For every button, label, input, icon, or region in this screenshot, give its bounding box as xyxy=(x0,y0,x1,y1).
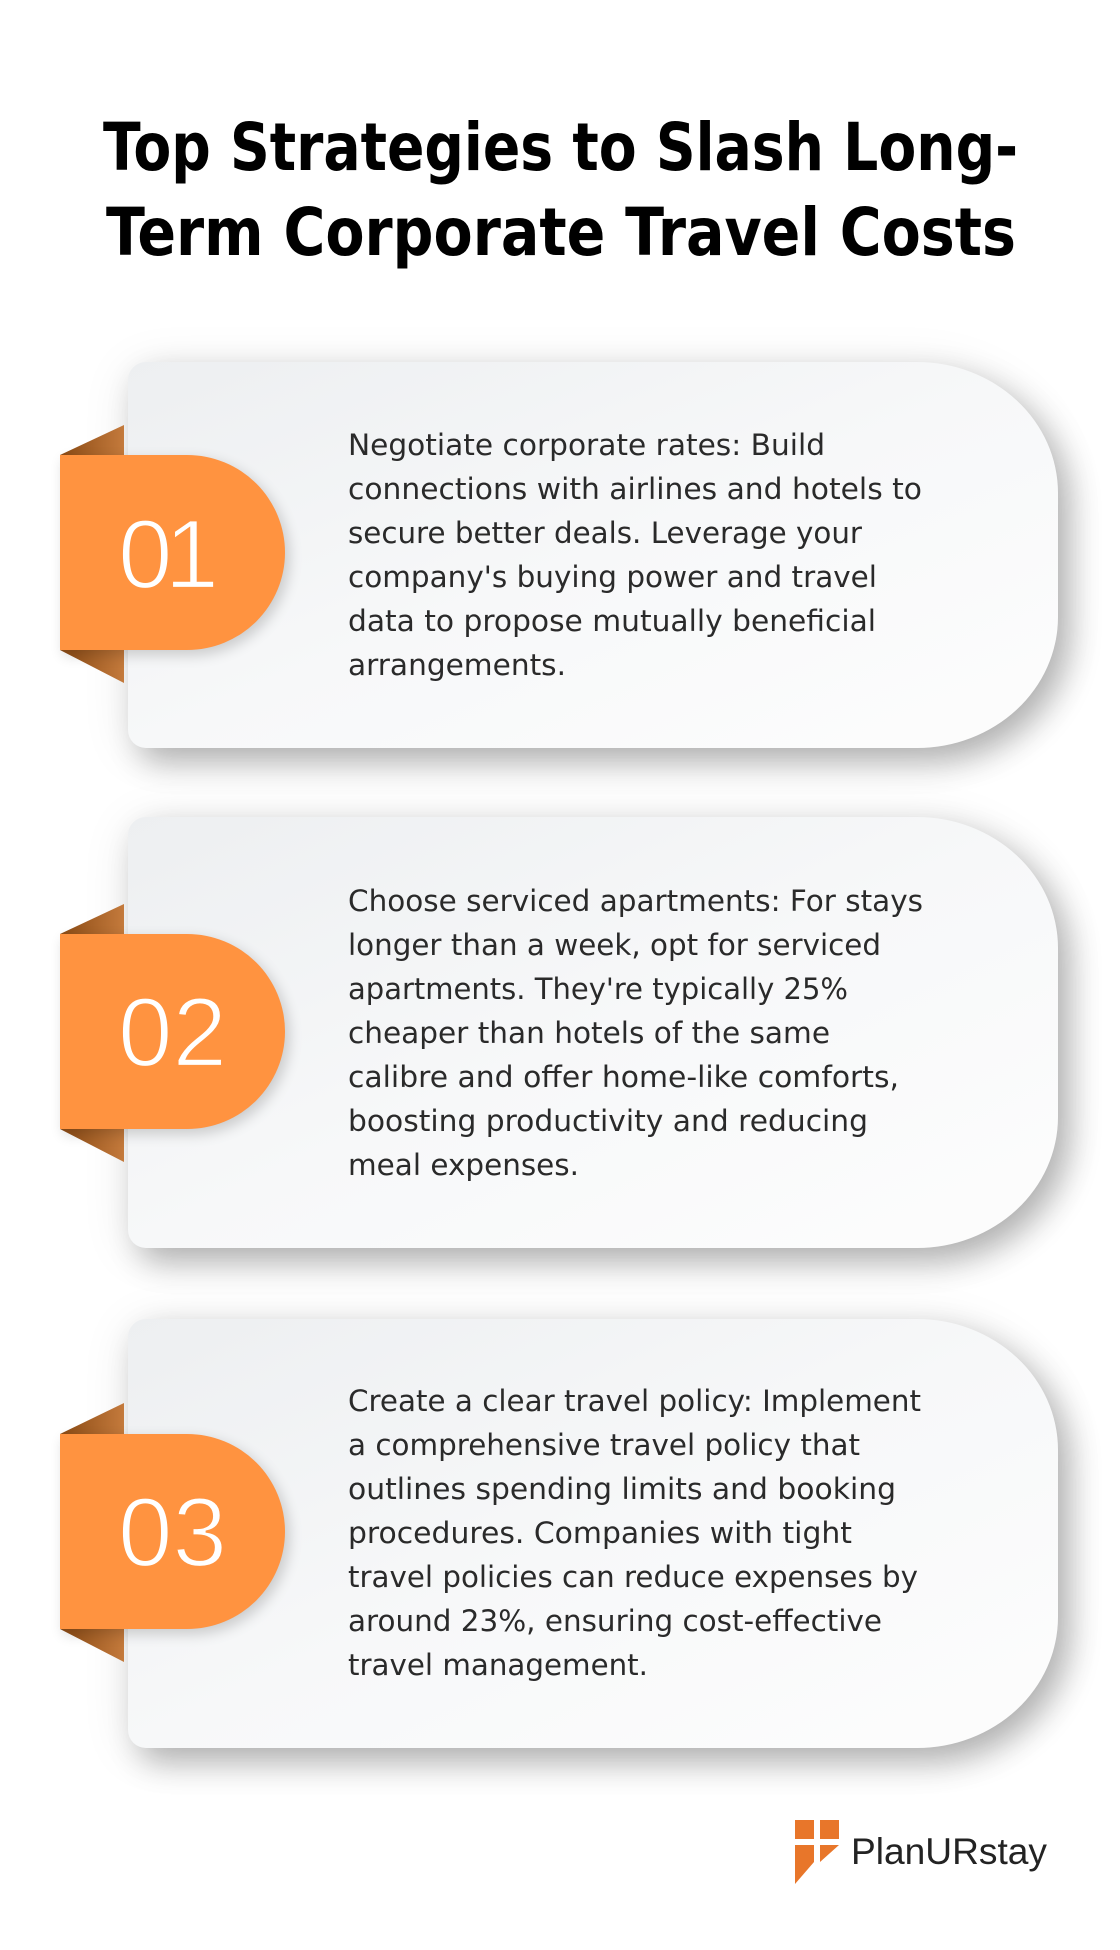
panel: strategy 03 xyxy=(60,1319,1070,1762)
text block 02: apartments. They're typically 25% xyxy=(348,972,848,1006)
icon: folded ribbon 01 xyxy=(60,425,289,683)
text block 02: Choose serviced apartments: For stays xyxy=(348,884,923,918)
text block 03: a comprehensive travel policy that xyxy=(348,1428,860,1462)
text block 02 xyxy=(348,884,923,1182)
icon: folded ribbon 03 xyxy=(60,1403,289,1662)
text block 01: arrangements. xyxy=(348,648,566,682)
text block 03: around 23%, ensuring cost-effective xyxy=(348,1604,882,1638)
icon: logo mark xyxy=(795,1820,839,1884)
number 02: 02 xyxy=(118,977,227,1087)
text block 03 xyxy=(348,1384,921,1682)
panel: strategy 02 xyxy=(60,817,1070,1262)
text block 01: company's buying power and travel xyxy=(348,560,877,594)
text block 01: data to propose mutually beneficial xyxy=(348,604,876,638)
title xyxy=(103,109,1018,271)
panel: strategy 01 xyxy=(60,362,1070,762)
text block 02: cheaper than hotels of the same xyxy=(348,1016,830,1050)
text block 03: Create a clear travel policy: Implement xyxy=(348,1384,921,1418)
text block 03: travel management. xyxy=(348,1648,648,1682)
text block 01: connections with airlines and hotels to xyxy=(348,472,922,506)
number 01: 01 xyxy=(118,499,215,609)
text block 02: boosting productivity and reducing xyxy=(348,1104,868,1138)
text block 02: calibre and offer home-like comforts, xyxy=(348,1060,899,1094)
text block 01 xyxy=(348,428,922,682)
text block 03: outlines spending limits and booking xyxy=(348,1472,896,1506)
text block 02: meal expenses. xyxy=(348,1148,579,1182)
text block 03: procedures. Companies with tight xyxy=(348,1516,852,1550)
text block 03: travel policies can reduce expenses by xyxy=(348,1560,918,1594)
logo: PlanURstay xyxy=(795,1820,1047,1884)
logo wordmark: PlanURstay xyxy=(851,1831,1047,1872)
text block 01: secure better deals. Leverage your xyxy=(348,516,863,550)
text block 01: Negotiate corporate rates: Build xyxy=(348,428,825,462)
number 03: 03 xyxy=(118,1477,227,1587)
icon: folded ribbon 02 xyxy=(60,904,289,1162)
text block 02: longer than a week, opt for serviced xyxy=(348,928,881,962)
